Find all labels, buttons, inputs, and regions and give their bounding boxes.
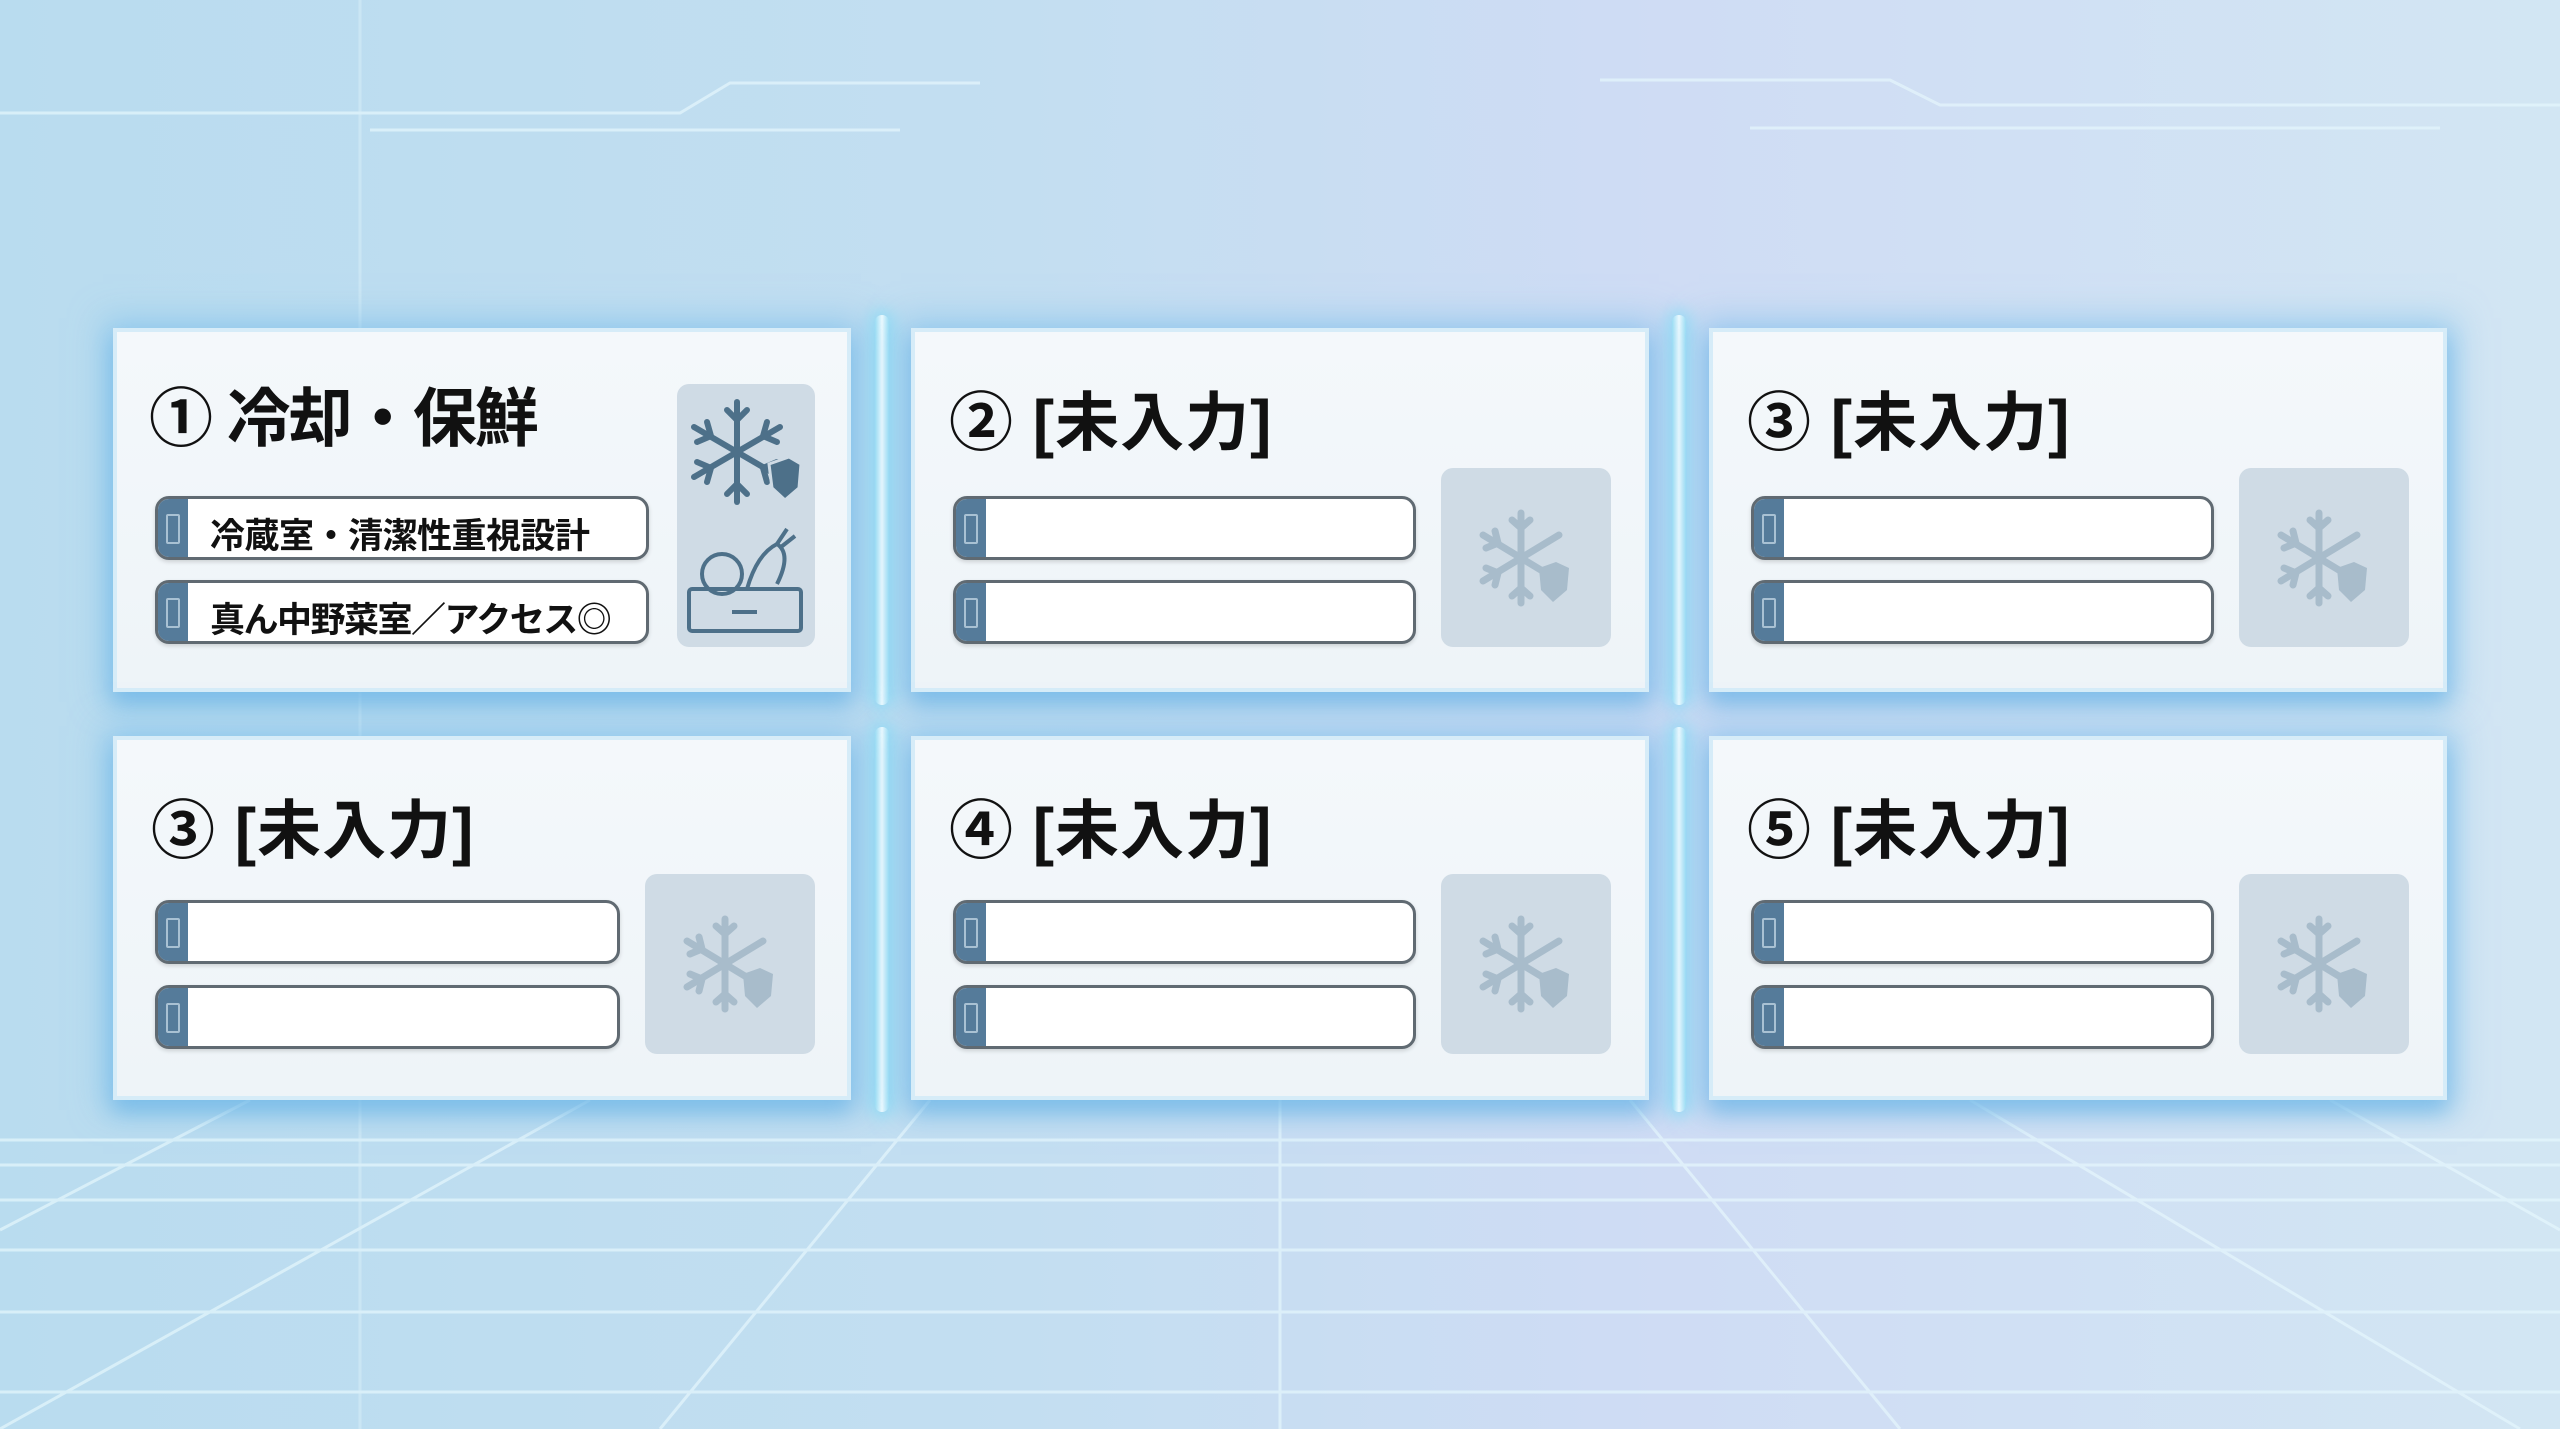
empty item 2	[953, 985, 1416, 1049]
empty item 1	[1751, 496, 2214, 560]
separator bars	[875, 315, 889, 705]
item 1: 冷蔵室・清潔性重視設計	[210, 517, 590, 556]
item 1	[155, 496, 649, 560]
icon: faded snowflake	[2239, 874, 2409, 1054]
empty item 1	[1751, 900, 2214, 964]
panel: 4	[911, 736, 1649, 1100]
icon: faded snowflake	[2239, 468, 2409, 647]
icon: faded snowflake	[645, 874, 815, 1054]
heading: ④ [未入力]	[949, 795, 1272, 867]
empty item 2	[1751, 580, 2214, 644]
item 2	[155, 580, 649, 644]
empty item 1	[953, 496, 1416, 560]
panel: 1 冷却・保鮮	[113, 328, 851, 692]
empty item 2	[1751, 985, 2214, 1049]
empty item 2	[953, 580, 1416, 644]
panel: 5	[1709, 736, 2447, 1100]
panel: 2	[911, 328, 1649, 692]
icon: faded snowflake	[1441, 468, 1611, 647]
empty item 1	[155, 900, 620, 964]
heading: ③ [未入力]	[151, 795, 474, 867]
panel: 3 top	[1709, 328, 2447, 692]
empty item 2	[155, 985, 620, 1049]
heading: ② [未入力]	[949, 387, 1272, 459]
panel: 3 bottom	[113, 736, 851, 1100]
item 2: 真ん中野菜室／アクセス◎	[210, 601, 610, 640]
heading: ⑤ [未入力]	[1747, 795, 2070, 867]
icon: snowflake and vegetable drawer	[677, 384, 815, 647]
heading: ① 冷却・保鮮	[149, 383, 537, 455]
icon: faded snowflake	[1441, 874, 1611, 1054]
heading: ③ [未入力]	[1747, 387, 2070, 459]
empty item 1	[953, 900, 1416, 964]
